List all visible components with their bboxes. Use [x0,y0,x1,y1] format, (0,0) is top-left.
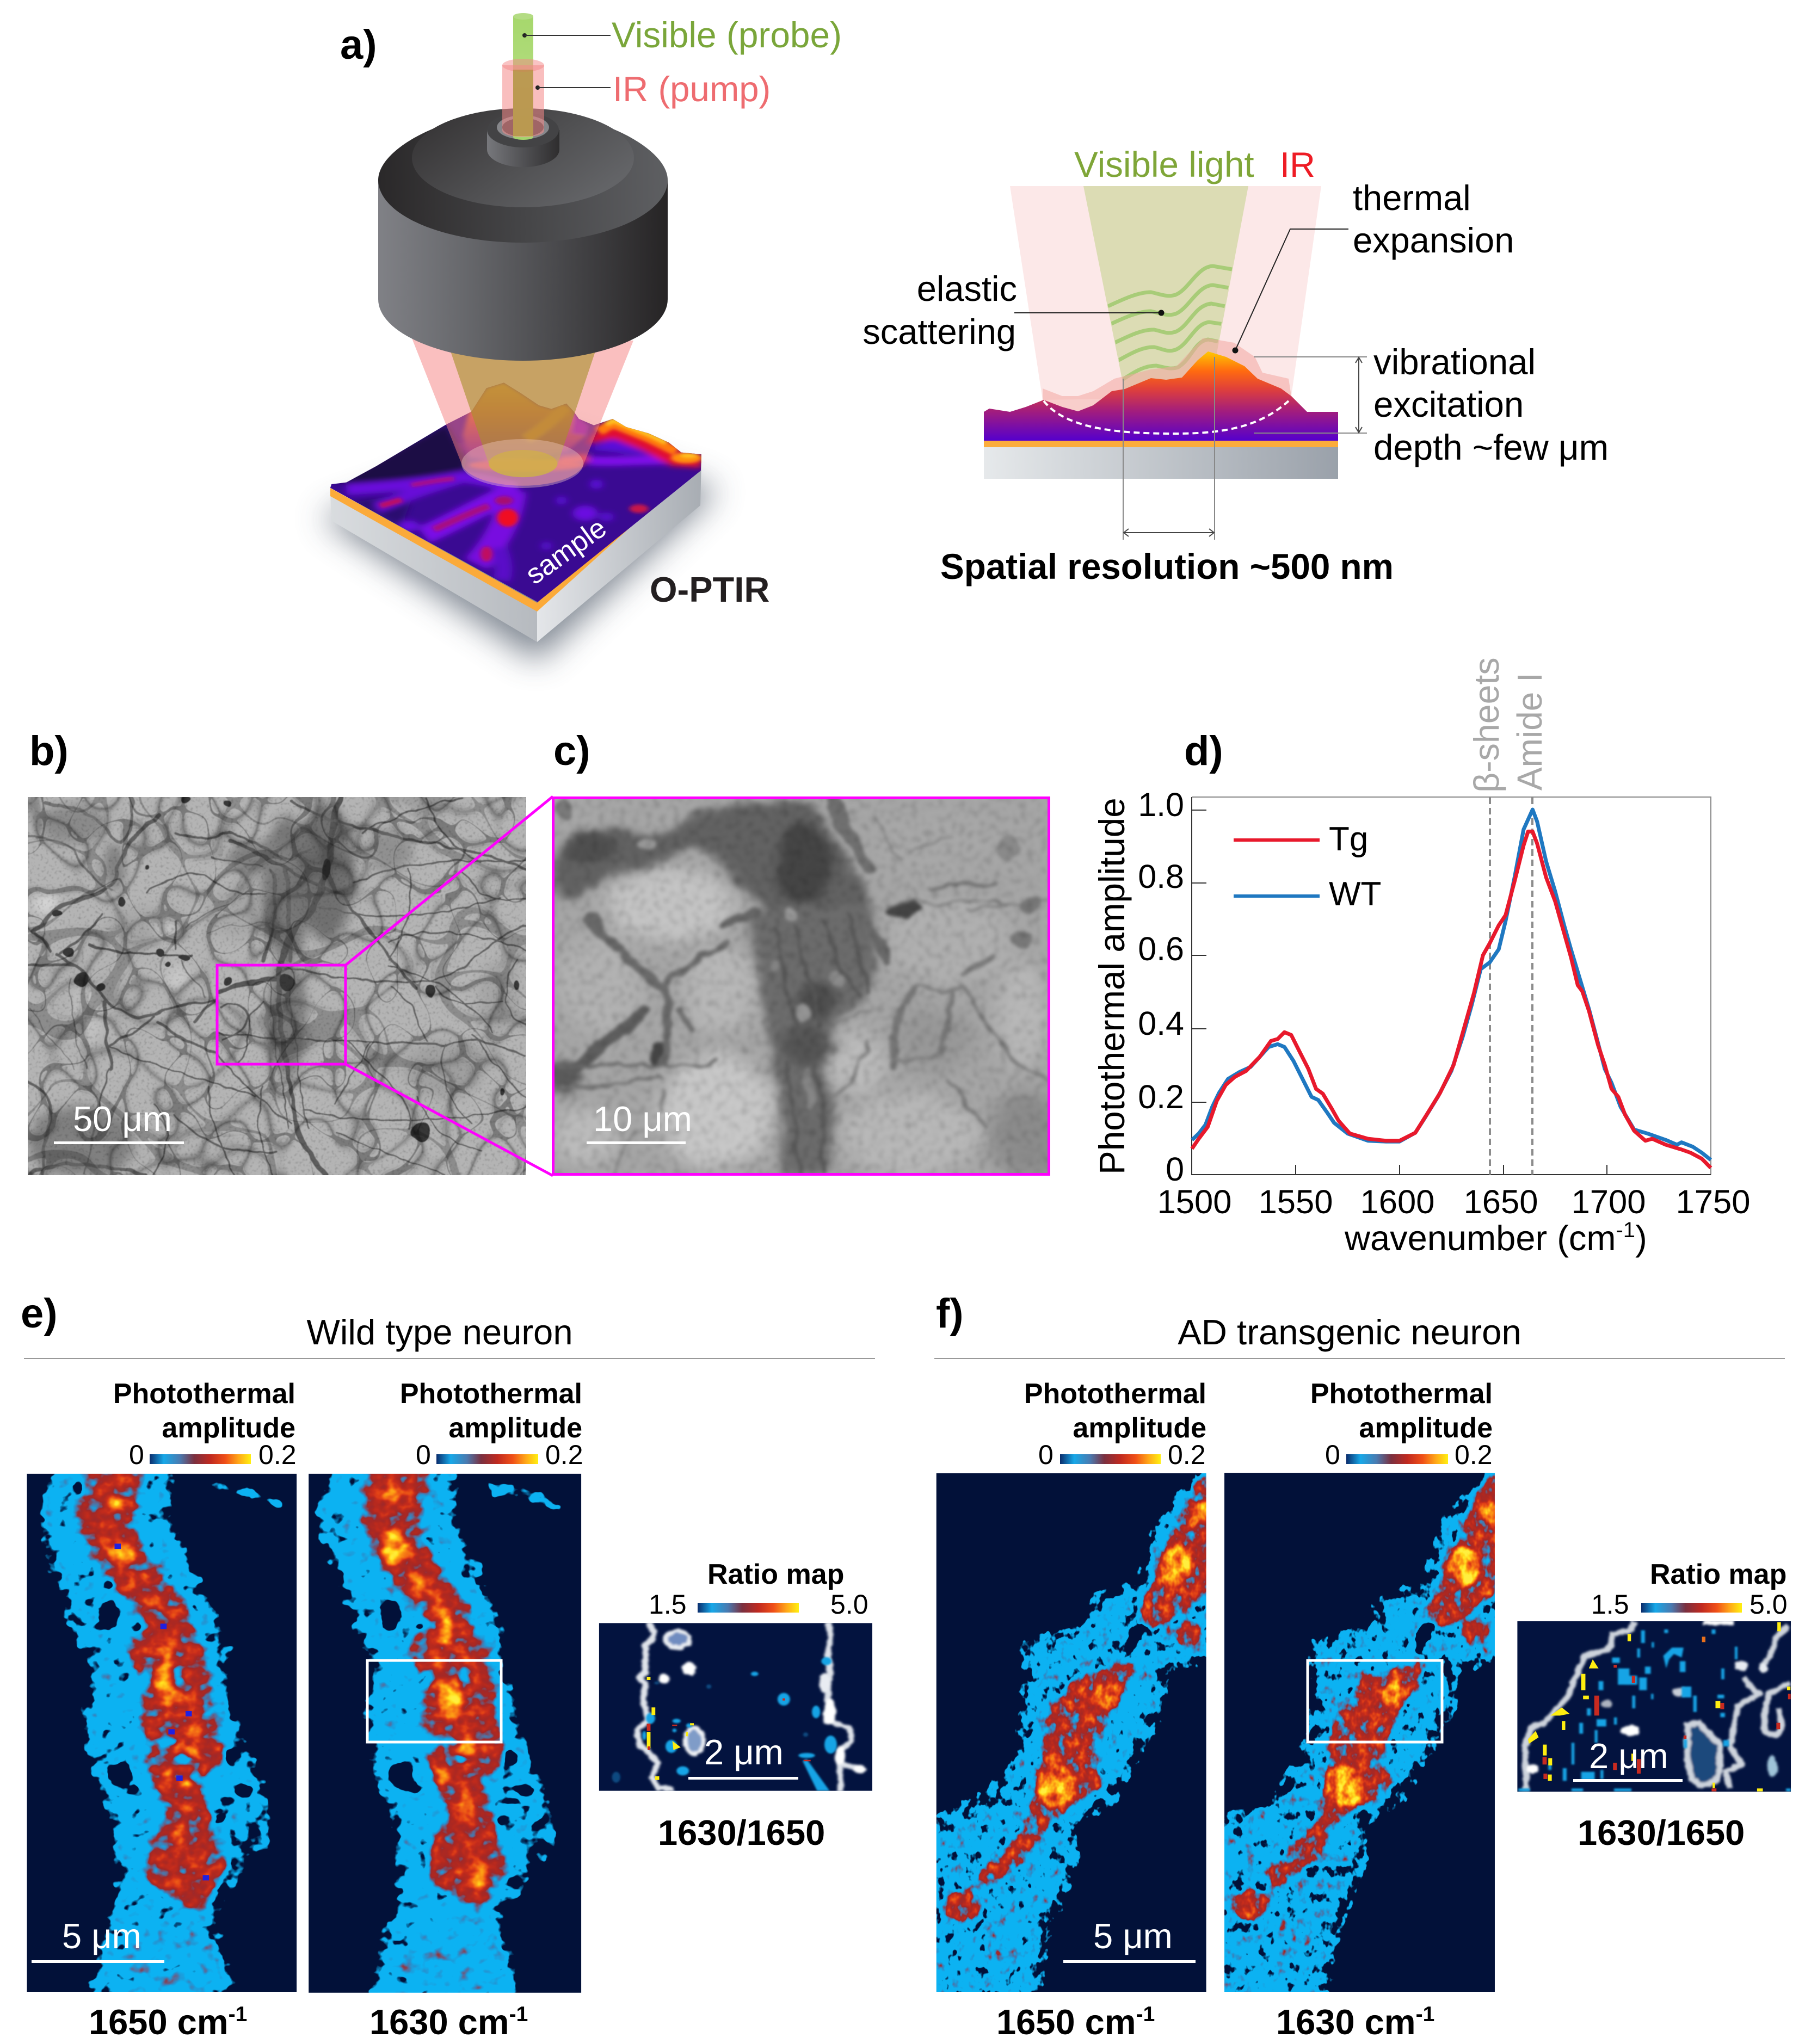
caption 1650: 1650 cm [89,2002,229,2042]
panel a: schematic of photothermal detection [863,145,1609,586]
label thermal expansion: expansion [1353,220,1514,260]
y axis ticks [1138,786,1184,1188]
leader: visible [522,33,611,38]
x axis title: wavenumber (cm [1345,1218,1616,1258]
ratio legend: 5.0 [830,1589,868,1620]
label a): a) [340,22,377,68]
panel b: SEM overview [16,728,539,1186]
colour legend 2 [400,1378,583,1470]
colour legend 1: 0.2 [1168,1440,1206,1470]
leader: IR [535,85,611,90]
label spatial resolution: Spatial resolution ~500 nm [940,547,1394,586]
sample topography surface [330,383,701,602]
visible beam [1083,186,1248,393]
scale bar 2 um: 2 μm [704,1732,784,1772]
colour legend 2 [1310,1378,1493,1470]
label amide I: Amide I [1510,672,1549,791]
heading: Wild type neuron [306,1312,573,1352]
map 1650 [0,1444,326,2021]
caption 1630: 1630 cm [369,2002,509,2042]
label elastic scattering: elastic [917,269,1017,308]
scale bar 5 um [1063,1916,1196,1963]
panel e: wild type neuron [0,1290,875,2042]
scale bar 5 um [32,1916,164,1963]
reference lines [1490,798,1532,1175]
colour legend 1: amplitude [1073,1412,1206,1444]
caption 1650: 1650 cm [996,2002,1136,2042]
leader: thermal expansion [1232,229,1348,354]
caption 1650: -1 [229,2003,247,2026]
y axis ticks: 0.2 [1138,1078,1184,1115]
panel a: O-PTIR objective setup [321,13,842,661]
x axis ticks [1157,1183,1750,1221]
ratio legend: 5.0 [1749,1589,1788,1620]
y axis ticks: 0 [1166,1151,1184,1188]
white selection box [367,1660,501,1742]
objective neck [487,113,559,167]
ratio map [599,1621,872,1792]
y axis title: Photothermal amplitude [1092,798,1132,1175]
colour legend 1 [1024,1378,1206,1470]
x axis ticks: 1550 [1259,1183,1333,1221]
excitation depth dashes [1044,401,1289,434]
colour legend 1: 0 [129,1440,144,1470]
scale bar 50 um [54,1099,184,1144]
x axis ticks: 1650 [1464,1183,1538,1221]
colour legend 2: 0 [416,1440,431,1470]
label c): c) [553,728,590,774]
saturated pixel markers [114,1543,209,1880]
y axis ticks: 1.0 [1138,786,1184,823]
scale bar 2 um: 2 μm [1589,1736,1668,1776]
heading: AD transgenic neuron [1178,1312,1521,1352]
ratio legend: 1.5 [1591,1589,1629,1620]
zoom box [217,965,346,1064]
objective lens [378,108,668,361]
scale bar 2 um [688,1732,798,1780]
y axis ticks: 0.6 [1138,930,1184,967]
scale bar 5 um: 5 μm [1093,1916,1173,1956]
micrograph c [555,799,1048,1173]
leader: elastic scattering [1014,310,1165,316]
colour legend 1: Photothermal [1024,1378,1206,1410]
panel c: SEM zoom [346,728,1070,1197]
ratio legend: 1.5 [649,1589,687,1620]
colour legend 2: amplitude [448,1412,582,1444]
red IR cone [412,338,633,486]
scale bar 2 um [1573,1736,1683,1782]
label elastic scattering: scattering [863,312,1016,351]
colour legend 1: 0 [1038,1440,1054,1470]
Tg curve [1192,831,1711,1168]
x axis title: ) [1635,1218,1647,1258]
ratio legend [1591,1559,1788,1620]
ratio legend: Ratio map [707,1559,844,1590]
label e): e) [21,1290,58,1337]
axis frame [1192,797,1711,1175]
caption 1650: -1 [1136,2003,1155,2026]
map 1650 [903,1444,1238,2021]
ratio legend [649,1559,868,1620]
IR pump beam [502,59,544,137]
map 1630 [286,1444,613,2021]
colour legend 2: Photothermal [400,1378,582,1410]
label O-PTIR: O-PTIR [650,570,769,609]
sample cross-section [984,351,1338,441]
ratio map [1517,1620,1791,1792]
caption 1630: -1 [509,2003,528,2026]
caption ratio: 1630/1650 [1578,1813,1745,1852]
colour legend 2: 0.2 [545,1440,583,1470]
white selection box [1308,1660,1442,1742]
scale bar 50 um: 50 μm [73,1099,172,1139]
map 1630 [1191,1444,1528,2021]
x axis title: -1 [1616,1218,1635,1242]
colour legend 2: 0.2 [1455,1440,1493,1470]
caption 1630: 1630 cm [1276,2002,1416,2042]
ratio legend: Ratio map [1650,1559,1786,1590]
substrate [984,447,1338,479]
magenta frame [553,798,1049,1174]
label f): f) [936,1290,964,1337]
colour legend 1 [113,1378,297,1470]
colour legend 1: Photothermal [113,1378,295,1410]
label vibrational excitation depth: depth ~few μm [1373,428,1609,467]
label vibrational excitation depth: excitation [1373,385,1524,424]
colour legend 1: amplitude [162,1412,295,1444]
panel d: photothermal spectra chart [1092,657,1750,1258]
label IR: IR [1280,145,1315,184]
y axis ticks: 0.4 [1138,1005,1184,1042]
legend [1234,820,1381,913]
colour legend 2: Photothermal [1310,1378,1493,1410]
label visible light: Visible light [1074,145,1254,184]
depth arrow [1254,357,1367,433]
zoom connector lines [346,796,553,1176]
sample slab [330,454,701,642]
legend: Tg [1329,820,1368,858]
resolution arrow [1123,357,1215,540]
label visible probe: Visible (probe) [612,15,842,55]
scattered waves [1109,266,1235,379]
expansion layer [1043,338,1291,413]
scale bar 5 um: 5 μm [62,1916,141,1956]
micrograph b [16,786,539,1186]
panel f: AD transgenic neuron [903,1290,1791,2042]
colour legend 1: 0.2 [258,1440,297,1470]
legend: WT [1329,875,1381,913]
gold layer [984,441,1338,447]
visible probe beam [513,13,533,140]
IR beam [1010,186,1321,400]
x axis ticks: 1500 [1157,1183,1231,1221]
x axis ticks: 1750 [1676,1183,1750,1221]
sample label: sample [520,512,612,591]
colour legend 2: 0 [1325,1440,1340,1470]
label beta sheets: β-sheets [1467,657,1506,793]
label vibrational excitation depth: vibrational [1373,342,1536,382]
focal spots [461,439,583,488]
label b): b) [29,728,69,774]
x axis ticks: 1700 [1572,1183,1646,1221]
caption ratio: 1630/1650 [658,1813,825,1852]
y axis ticks: 0.8 [1138,858,1184,895]
WT curve [1192,810,1711,1160]
label IR pump: IR (pump) [613,69,771,109]
scale bar 10 um: 10 μm [593,1099,692,1139]
slab shadow [321,435,718,661]
label thermal expansion: thermal [1353,178,1471,218]
x axis ticks: 1600 [1360,1183,1434,1221]
caption 1630: -1 [1416,2003,1434,2026]
label d): d) [1184,728,1223,774]
yellow visible cone [449,348,596,477]
colour legend 2: amplitude [1359,1412,1493,1444]
